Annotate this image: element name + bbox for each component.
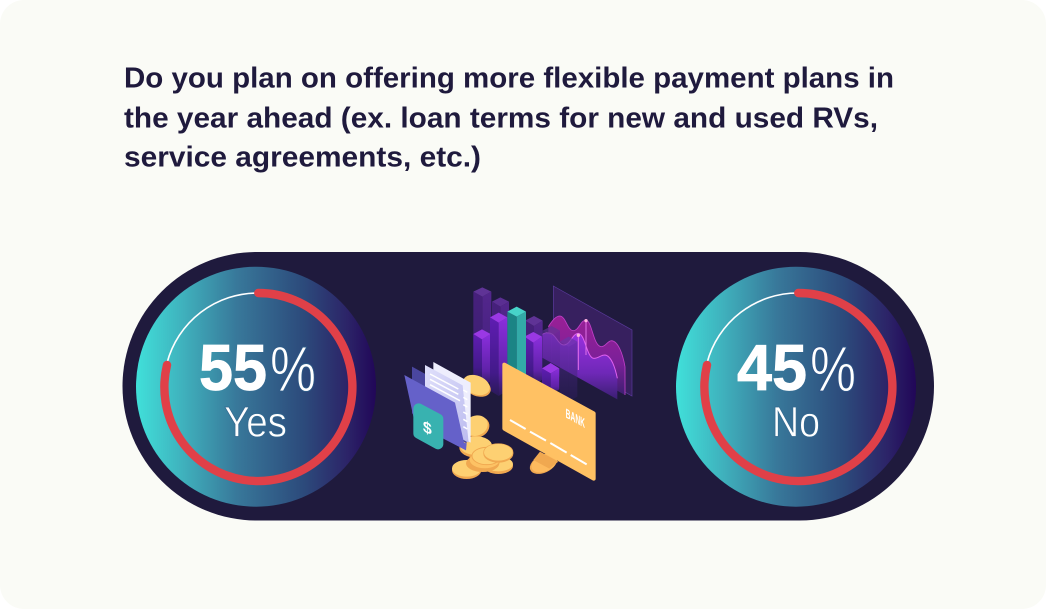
chart panel (542, 286, 632, 399)
heading (124, 62, 894, 174)
heading: the year ahead (ex. loan terms for new and used RVs, (124, 102, 878, 134)
icon: folder (404, 362, 471, 450)
coins (452, 371, 513, 479)
icon: bank card (504, 365, 594, 479)
gauge: no 45%: No (772, 399, 820, 447)
icon: bank card: BANK (566, 406, 585, 432)
gauge: yes 55%: 55 (199, 331, 267, 404)
icon: dollar badge: $ (423, 417, 433, 439)
bar chart (473, 287, 577, 402)
panel: dark pill (122, 252, 934, 520)
gauge: no 45% (676, 267, 916, 507)
gauge: no 45%: % (810, 333, 856, 405)
gauge: yes 55%: Yes (224, 399, 287, 447)
heading: service agreements, etc.) (124, 142, 481, 174)
gauge: yes 55% (136, 267, 376, 507)
illustration: finance isometric (404, 286, 632, 479)
gauge: no 45%: 45 (737, 331, 807, 404)
gauge: yes 55%: % (270, 333, 316, 405)
heading: Do you plan on offering more flexible payment plans in (124, 62, 894, 94)
